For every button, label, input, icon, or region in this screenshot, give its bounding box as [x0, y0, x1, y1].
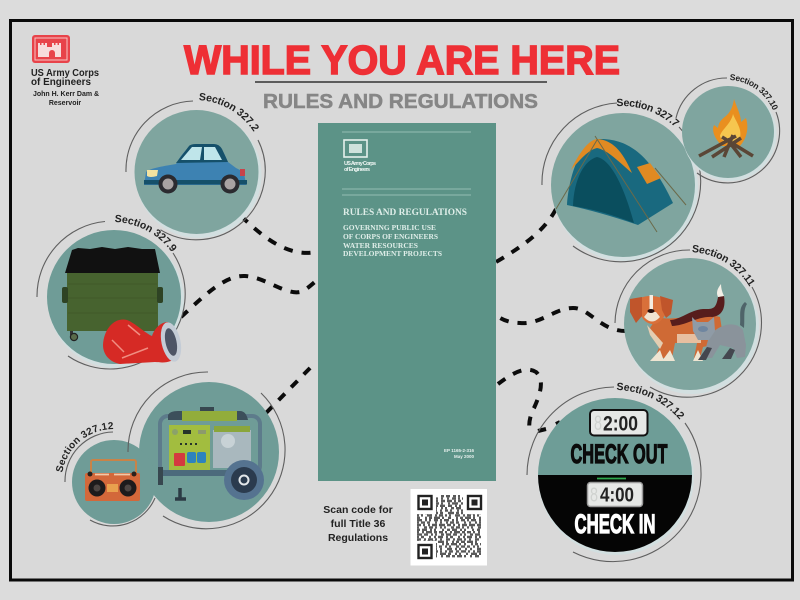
icon: boombox: [85, 460, 140, 501]
panel: booklet cover: of Engineers: [344, 167, 370, 173]
panel: booklet cover: OF CORPS OF ENGINEERS: [343, 232, 438, 241]
check out label: CHECK OUT: [570, 439, 668, 469]
connector: dumpster to booklet: [181, 276, 316, 317]
QR code: [410, 489, 487, 566]
panel: booklet cover: RULES AND REGULATIONS: [343, 208, 467, 218]
logo: US Army Corps of Engineers: of Engineers: [31, 77, 91, 88]
panel: booklet cover: [318, 123, 496, 481]
logo: US Army Corps of Engineers: John H. Kerr Dam &: [33, 91, 99, 98]
connector: pets to booklet: [497, 308, 626, 331]
panel: Section 327.12 check-in and check-out: [526, 382, 702, 562]
icon: crushed red can: [103, 320, 184, 364]
scan code caption: Regulations: [328, 532, 388, 544]
check out clock: 8: [594, 412, 602, 435]
section label: Section 327.11: [692, 245, 754, 286]
panel: Section 327.9 refuse: [36, 214, 186, 370]
icon: tent: [556, 136, 686, 232]
panel: Section 327.12 noise: [56, 372, 286, 530]
scan code caption: full Title 36: [331, 518, 385, 530]
panel: booklet cover: GOVERNING PUBLIC USE: [343, 223, 436, 232]
section label: Section 327.7: [616, 98, 680, 126]
section label: Section 327.9: [115, 214, 176, 251]
icon: dog: [630, 284, 724, 361]
check in clock: 4:00: [600, 484, 634, 506]
icon: logs: [699, 135, 753, 157]
section label: Section 327.12: [56, 422, 114, 472]
icon: flames: [713, 99, 747, 146]
scan code caption: Scan code for: [323, 504, 393, 516]
check in clock: [588, 482, 642, 506]
icon: cat: [692, 302, 747, 360]
panel: booklet cover: WATER RESOURCES: [343, 241, 418, 250]
section label: Section 327.10: [730, 74, 778, 110]
connector: check-in to booklet: [498, 370, 560, 432]
panel: Section 327.7 camping: [541, 98, 702, 262]
icon: generator: [158, 407, 264, 500]
icon: car: [144, 144, 247, 194]
connector: car to booklet: [241, 216, 316, 253]
connector: tent to booklet: [496, 209, 556, 262]
panel: booklet cover: May 2000: [454, 454, 474, 459]
check in status marks: [597, 478, 626, 480]
scan code caption: [323, 504, 393, 544]
title rule: [255, 81, 547, 83]
check out clock: [590, 410, 648, 436]
section label: Section 327.12: [616, 382, 684, 420]
panel: booklet cover: DEVELOPMENT PROJECTS: [343, 249, 442, 258]
check in label: CHECK IN: [574, 509, 656, 539]
check out clock: 2:00: [603, 412, 638, 436]
panel: Section 327.2 vehicles: [125, 93, 266, 240]
logo: US Army Corps of Engineers: US Army Corps: [31, 68, 99, 79]
panel: booklet cover: US Army Corps: [344, 161, 376, 167]
logo: US Army Corps of Engineers: Reservoir: [49, 100, 81, 107]
logo: US Army Corps of Engineers: [31, 35, 99, 107]
subtitle: RULES AND REGULATIONS: [263, 90, 538, 113]
connector: generator to booklet: [266, 366, 312, 413]
panel: booklet cover: EP 1165-2-316: [444, 448, 474, 453]
section label: Section 327.2: [199, 93, 259, 132]
panel: Section 327.10 campfire: [676, 74, 780, 184]
panel: Section 327.11 pets: [614, 245, 762, 398]
check in clock: 8: [590, 484, 598, 506]
icon: dumpster: [62, 247, 163, 341]
title: WHILE YOU ARE HERE: [184, 37, 620, 83]
